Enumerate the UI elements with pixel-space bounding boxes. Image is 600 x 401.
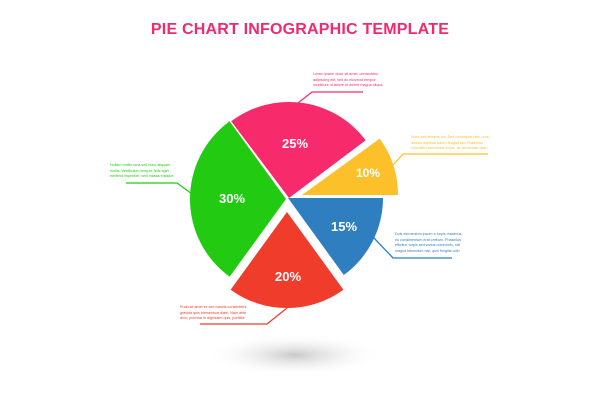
title: PIE CHART INFOGRAPHIC TEMPLATE [151, 21, 449, 38]
text: pink: incididunt ut labore et dolore magna aliqua [313, 83, 382, 87]
text: pink [313, 72, 383, 87]
slice: 10% yellow: 10% [356, 166, 380, 180]
text: pink: Lorem ipsum dolor sit amet, consectetur [313, 72, 379, 76]
text: yellow [411, 135, 489, 150]
leader: yellow [393, 154, 488, 165]
slice: 30% green [190, 121, 286, 277]
text: blue: efficitur, turpis sed varius commodo, nisi [395, 243, 460, 247]
leader: pink [298, 92, 363, 103]
slice: 20% red: 20% [275, 269, 301, 284]
slice: 30% green: 30% [219, 191, 245, 206]
slice: 15% blue [288, 198, 383, 275]
slice: 20% red [231, 212, 343, 308]
text: green [110, 163, 174, 178]
slice: 10% yellow [302, 139, 398, 195]
text: green: mollis. Vestibulum tempor, felis eget [110, 169, 169, 173]
leader: red [200, 308, 287, 324]
text: blue: eu condimentum erat pretium. Phasellus [395, 238, 461, 242]
text: yellow: dictum dapibus ipsum feugiat sed Phasellus [411, 141, 483, 145]
leader: green [126, 183, 192, 194]
text: green: eleifend imperdiet, velit massa tristique [110, 174, 174, 178]
text: yellow: Nunc sed tempus dui. Sed consequat nibh urna [411, 135, 489, 139]
text: yellow: convallis commentur turpis, ac accumsan diam [411, 146, 487, 150]
leader: blue [374, 238, 452, 258]
text: blue [395, 232, 462, 253]
shadow [205, 333, 385, 377]
text: red: Proin sit amet ex sed mauris consectetur [180, 305, 247, 309]
text: blue: Duis elementum ipsum a turpis maximus, [395, 232, 462, 236]
text: red: gravida quis elementum diam. Nam ante [180, 311, 246, 315]
text: pink: adipiscing elit, sed do eiusmod tempor [313, 78, 376, 82]
text: blue: magna bibendum nisi, quis fringilla odio [395, 249, 460, 253]
slice: 25% pink: 25% [282, 136, 308, 151]
slice: 15% blue: 15% [331, 219, 357, 234]
text: red [180, 305, 247, 320]
text: red: arcu, pulvinar in dignissim quis, porttitor [180, 316, 245, 320]
slice: 25% pink [231, 102, 366, 198]
text: green: Nullam mollis urna sed nunc aliquam [110, 163, 170, 167]
